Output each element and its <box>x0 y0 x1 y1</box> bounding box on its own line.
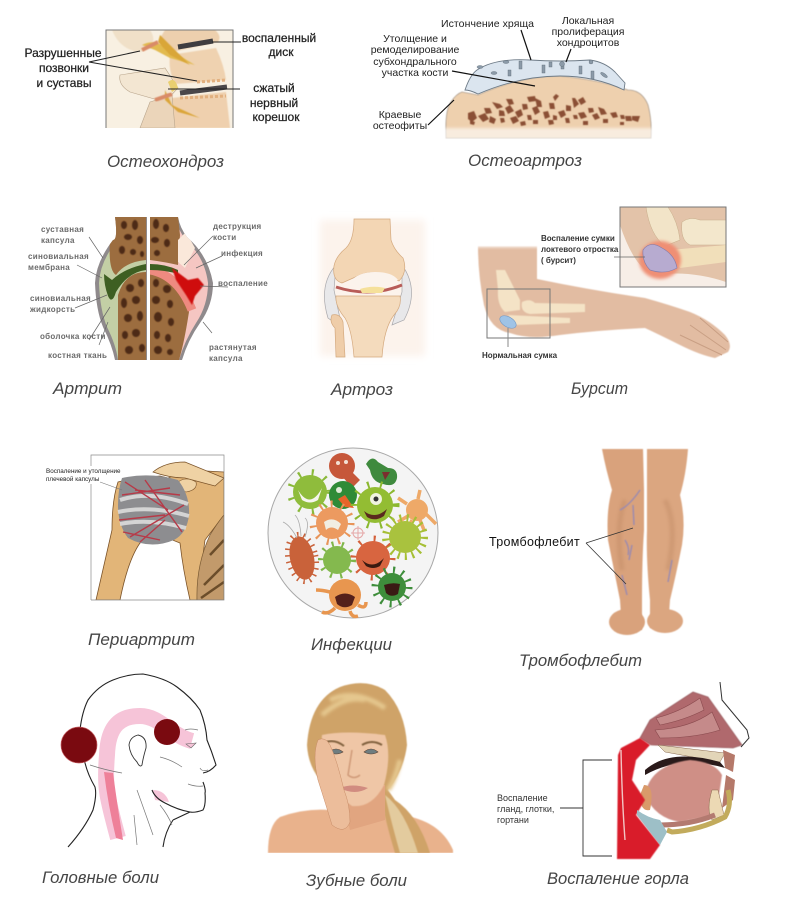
leader <box>100 482 122 490</box>
pain spot temple <box>154 719 180 745</box>
pharynx white line <box>621 750 625 840</box>
label: compressed root: сжатый <box>253 81 295 95</box>
varicose veins <box>620 490 672 595</box>
caption: Воспаление горла <box>547 870 689 888</box>
fade at bone base <box>440 128 656 140</box>
palate bone <box>658 745 725 762</box>
centre divider <box>147 216 150 361</box>
upper bone <box>110 216 146 275</box>
side ligaments <box>324 265 412 328</box>
hand fingers <box>680 318 728 355</box>
caption: Остеохондроз <box>107 153 224 171</box>
epiglottis area <box>637 810 667 845</box>
bone marrow pattern <box>468 94 640 126</box>
woman photo <box>268 683 453 853</box>
label: osteophytes: Краевые <box>379 109 421 121</box>
caption: Тромбофлебит <box>519 652 642 670</box>
chin band <box>667 790 729 832</box>
lips <box>344 786 368 792</box>
shading <box>619 500 672 570</box>
label: inflamed bursa: Воспаление сумки <box>541 234 615 243</box>
white label background <box>46 466 96 484</box>
synovial fluid left <box>104 264 146 300</box>
labels: damaged vertebrae: и суставы <box>37 76 91 90</box>
capsule <box>118 475 189 545</box>
hair highlights <box>322 696 400 790</box>
crosshair <box>351 526 365 540</box>
ear <box>129 735 146 766</box>
nasal cavity <box>640 692 742 748</box>
panel: throat inflammation <box>497 682 749 888</box>
cartilage <box>465 60 625 94</box>
label: subchondral: субхондрального <box>373 56 457 68</box>
labels: left side: синовиальная <box>28 252 89 261</box>
nose outline <box>720 682 749 747</box>
jaw patch <box>153 790 169 802</box>
caption: Остеоартроз <box>468 152 582 170</box>
red pharynx <box>617 738 660 859</box>
labels: left side: мембрана <box>28 263 70 272</box>
labels: damaged vertebrae: Разрушенные <box>24 46 102 60</box>
labels: left side: жидкорсть <box>29 305 75 314</box>
label: гортани <box>497 815 529 825</box>
panel: infections <box>268 448 438 654</box>
inset <box>620 207 726 287</box>
spine frame <box>106 30 233 128</box>
lower bone <box>118 272 146 360</box>
label: inflamed disc: воспаленный <box>242 31 316 45</box>
labels: right side: деструкция <box>213 222 262 231</box>
tongue <box>645 760 722 822</box>
shoulders <box>268 810 453 853</box>
destruction <box>178 232 195 268</box>
labels: right side: капсула <box>209 354 243 363</box>
label: плечевой капсулы <box>46 475 100 483</box>
chin inner <box>660 815 715 825</box>
label: osteophytes: остеофиты <box>373 120 427 132</box>
right leg <box>647 449 688 628</box>
caption: Артрит <box>52 380 122 398</box>
label lines <box>89 42 241 89</box>
label: proliferation: пролиферация <box>552 26 624 38</box>
cartilage <box>350 272 398 287</box>
teeth/lip <box>722 750 735 808</box>
label: Воспаление и утолщение <box>46 468 121 475</box>
face details <box>90 729 208 845</box>
panel: toothache <box>268 683 453 890</box>
labels: left side: синовиальная <box>30 294 91 303</box>
skin background <box>320 220 425 356</box>
face <box>322 732 388 806</box>
labels: right side: инфекция <box>221 249 263 258</box>
normal bursa <box>498 313 518 331</box>
turbinates <box>655 698 720 738</box>
label: proliferation: хондроцитов <box>557 37 620 49</box>
labels: left side: костная ткань <box>48 351 107 360</box>
label leader <box>586 528 633 584</box>
neck <box>348 785 385 830</box>
panel: arthritis <box>28 216 268 398</box>
ponytail <box>385 795 418 853</box>
labels: right side: воспаление <box>218 279 268 288</box>
shoulder illustration <box>96 462 224 600</box>
caption: Инфекции <box>311 636 392 654</box>
pink pain path <box>106 716 192 838</box>
caption: Зубные боли <box>306 872 407 890</box>
label: inflamed bursa: ( бурсит) <box>541 256 576 265</box>
label: thinning: Истончение хряща <box>441 18 534 30</box>
petri dish <box>268 448 438 618</box>
bone holes <box>119 219 174 355</box>
panel: osteoarthrosis <box>371 15 656 170</box>
inset frame <box>620 207 726 287</box>
labels: left side: суставная <box>41 225 84 234</box>
label: proliferation: Локальная <box>562 15 614 27</box>
meniscus <box>336 285 402 292</box>
panel: arthrosis <box>320 219 425 399</box>
right foot <box>647 609 683 633</box>
labels: right side: растянутая <box>209 343 257 352</box>
bracket <box>560 760 612 856</box>
panel: headaches <box>42 674 216 887</box>
arm top fade <box>474 238 540 247</box>
forearm bones <box>496 270 585 325</box>
arm <box>478 246 730 358</box>
mandible <box>709 790 724 820</box>
left leg <box>602 449 644 630</box>
label: subchondral: Утолщение и <box>383 33 447 45</box>
caption: Артроз <box>330 381 393 399</box>
left foot <box>609 609 645 635</box>
label: compressed root: корешок <box>253 110 300 124</box>
label: inflamed disc: диск <box>269 45 294 59</box>
caption: Бурсит <box>571 380 628 398</box>
panel: osteochondrosis <box>24 30 316 171</box>
panel: bursitis <box>474 207 730 398</box>
label: subchondral: участка кости <box>382 67 448 79</box>
eyes <box>329 749 378 754</box>
frame <box>91 455 224 600</box>
panel: periarthritis <box>46 455 224 649</box>
fibula <box>331 315 345 357</box>
head outline <box>68 674 216 847</box>
femur <box>334 219 405 283</box>
lower leader <box>507 328 509 347</box>
labels: left side: капсула <box>41 236 75 245</box>
bacteria <box>283 453 436 616</box>
upper leader <box>614 256 645 258</box>
eyebrows <box>326 741 382 746</box>
caption: Периартрит <box>88 631 195 649</box>
labels: right side: кости <box>213 233 236 242</box>
labels: damaged vertebrae: позвонки <box>39 61 89 75</box>
label lines <box>75 236 228 345</box>
label: subchondral: ремоделирование <box>371 44 459 56</box>
nose <box>348 750 360 778</box>
small frame <box>487 289 550 338</box>
chondrocytes <box>477 60 608 79</box>
label: Тромбофлебит <box>489 535 580 549</box>
caption: Головные боли <box>42 869 159 887</box>
eye <box>186 743 196 748</box>
hair back <box>307 683 430 853</box>
label: compressed root: нервный <box>250 96 298 110</box>
label: inflamed bursa: локтевого отростка <box>541 245 619 254</box>
neck strip <box>104 772 123 840</box>
tonsil patch <box>640 785 652 810</box>
panel: thrombophlebitis <box>489 449 688 670</box>
hand <box>315 739 350 829</box>
label: гланд, глотки, <box>497 804 554 814</box>
tibia <box>336 296 400 357</box>
label: Воспаление <box>497 793 548 803</box>
label: normal bursa: Нормальная сумка <box>482 351 558 360</box>
mouth dark <box>645 757 725 775</box>
pain spot back <box>61 727 97 763</box>
bone <box>446 76 651 138</box>
labels: left side: оболочка кости <box>40 332 106 341</box>
leader lines <box>428 30 571 125</box>
spine illustration <box>106 30 233 128</box>
joint illustration <box>95 217 213 360</box>
